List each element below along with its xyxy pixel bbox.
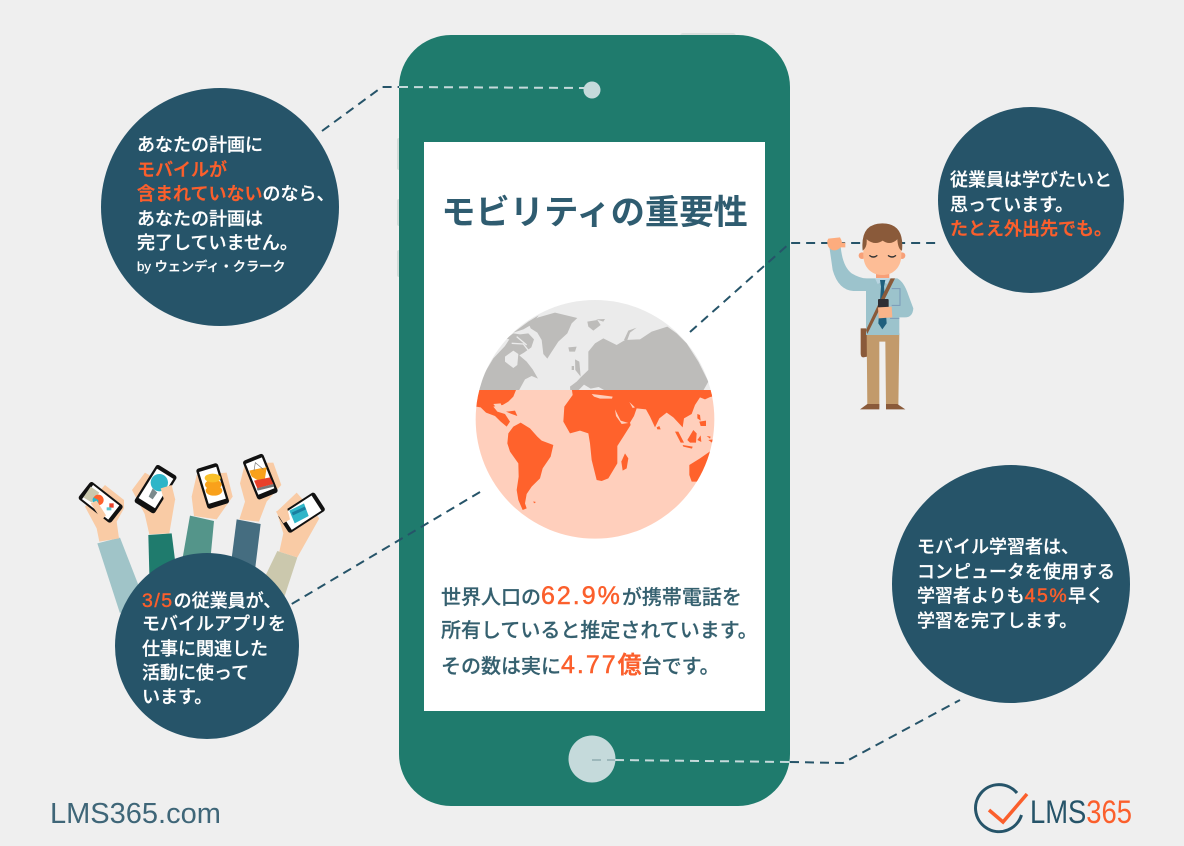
callout: employees using mobile apps: います。 bbox=[142, 687, 212, 707]
connector: quote to camera bbox=[322, 87, 590, 131]
callout: mobile learners finish faster: 学習を完了します。 bbox=[917, 611, 1077, 631]
hudson bay and arctic channels bbox=[505, 351, 518, 368]
connector: globe to apps bubble bbox=[290, 492, 480, 605]
callout: mobile learners finish faster: 学習者よりも45%早く bbox=[917, 585, 1104, 607]
text block: global mobile ownership statistic bbox=[441, 582, 758, 679]
callout: quote bubble: モバイルが bbox=[137, 160, 227, 180]
callout: quote bubble: あなたの計画に bbox=[137, 135, 263, 155]
callout: employees want to learn: 従業員は学びたいと bbox=[950, 170, 1112, 190]
callout: mobile learners finish faster: コンピュータを使用する bbox=[917, 562, 1115, 582]
footer website: LMS365.com bbox=[50, 798, 221, 830]
text block: global mobile ownership statistic: 所有していると推定されています。 bbox=[441, 620, 758, 642]
callout: employees using mobile apps bbox=[115, 553, 299, 739]
connector: home button to learner bubble bbox=[592, 700, 960, 763]
callout: quote bubble: あなたの計画は bbox=[137, 209, 263, 229]
callout: quote bubble: by ウェンディ・クラーク bbox=[137, 259, 286, 274]
callout: quote bubble: 含まれていないのなら、 bbox=[137, 184, 334, 204]
callout: employees want to learn: たとえ外出先でも。 bbox=[950, 219, 1112, 239]
illustration: commuter man bbox=[827, 223, 913, 409]
title: モビリティの重要性 bbox=[441, 194, 748, 232]
callout: quote bubble: 完了していません。 bbox=[137, 233, 298, 253]
callout: employees using mobile apps: 3/5の従業員が、 bbox=[142, 590, 281, 612]
callout: employees want to learn: 思っています。 bbox=[950, 195, 1073, 215]
logo: LMS365 mark and wordmark bbox=[976, 785, 1132, 832]
globe bbox=[476, 300, 714, 539]
callout: mobile learners finish faster: モバイル学習者は、 bbox=[917, 537, 1079, 557]
phone body bbox=[397, 33, 790, 806]
callout: quote bubble bbox=[101, 88, 339, 326]
callout: employees want to learn bbox=[938, 107, 1124, 293]
callout: employees using mobile apps: 仕事に関連した bbox=[142, 639, 268, 659]
logo: LMS365 mark and wordmark: LMS365 bbox=[1030, 794, 1132, 830]
callout: employees using mobile apps: 活動に使って bbox=[142, 663, 249, 683]
text block: global mobile ownership statistic: その数は実に4.77億台です。 bbox=[441, 651, 720, 679]
connector: globe to employee bubble bbox=[690, 243, 940, 332]
callout: employees using mobile apps: モバイルアプリを bbox=[142, 614, 286, 634]
illustration: hands holding phones bbox=[78, 453, 326, 613]
text block: global mobile ownership statistic: 世界人口の62.9%が携帯電話を bbox=[441, 582, 742, 610]
callout: mobile learners finish faster bbox=[892, 465, 1130, 703]
